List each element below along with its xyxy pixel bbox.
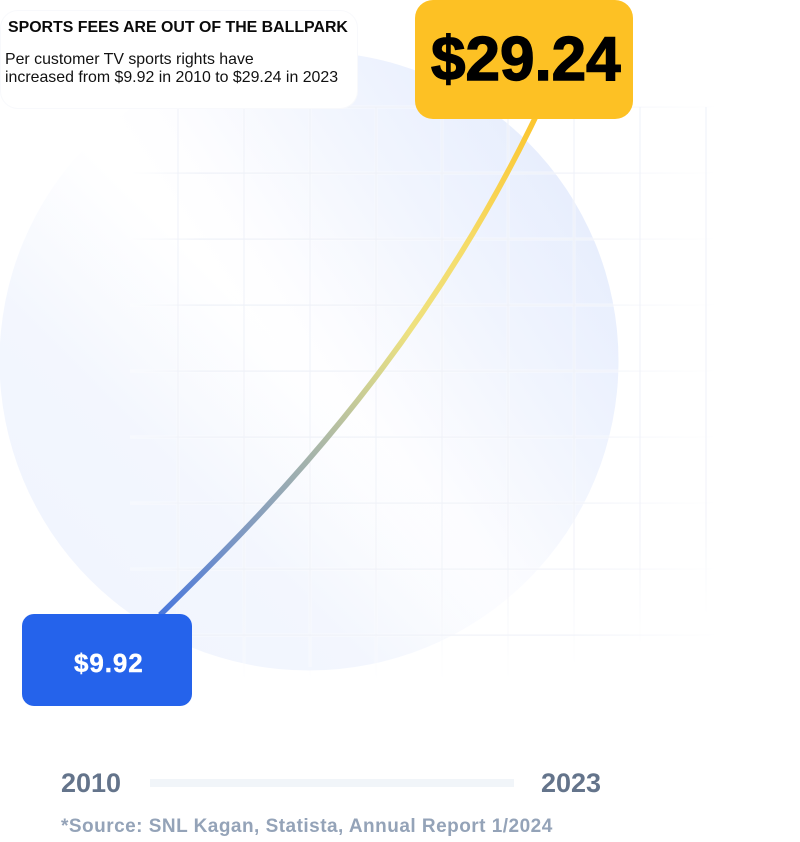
value text: $9.92	[74, 648, 144, 678]
grid lines	[130, 105, 720, 682]
timeline bar	[150, 779, 514, 787]
description text: Per customer TV sports rights have	[5, 51, 254, 68]
heading: SPORTS FEES ARE OUT OF THE BALLPARK	[8, 19, 348, 36]
growth curve line	[160, 112, 538, 615]
background circle	[0, 52, 618, 670]
panel: title card	[0, 10, 358, 109]
source note: *Source: SNL Kagan, Statista, Annual Report 1/2024	[61, 816, 553, 837]
value text: $29.24	[431, 25, 621, 94]
callout: 2010 value	[22, 614, 192, 706]
callout: 2023 value	[415, 0, 633, 118]
description text: increased from $9.92 in 2010 to $29.24 in 2023	[5, 69, 338, 86]
start year: 2010	[61, 768, 121, 798]
end year: 2023	[541, 768, 601, 798]
axis: timeline	[61, 768, 601, 798]
description text	[5, 51, 338, 86]
